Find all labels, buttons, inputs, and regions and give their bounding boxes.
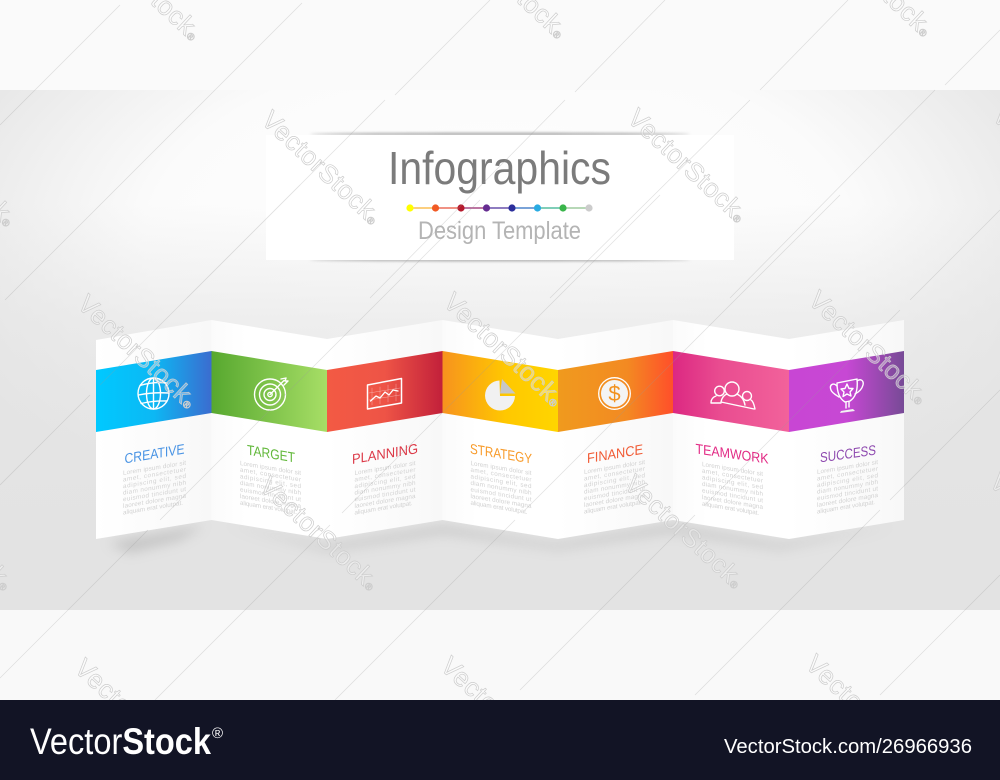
text: strategy: aliquam erat volutpat. xyxy=(470,500,528,516)
VectorStock watermarks: VectorStock® xyxy=(438,286,570,412)
text: planning: amet, consectetuer xyxy=(354,467,415,484)
text: strategy: Lorem ipsum dolor sit xyxy=(470,460,532,477)
text: success: euismod tincidunt ut xyxy=(817,485,878,502)
text: strategy: euismod tincidunt ut xyxy=(470,486,532,503)
title card xyxy=(266,133,734,261)
top background strip xyxy=(0,0,1000,90)
VectorStock watermarks: VectorStock® xyxy=(69,652,201,778)
icon: chart board xyxy=(368,378,402,409)
text: strategy: amet, consectetuer xyxy=(470,467,531,484)
text: strategy: laoreet dolore magna xyxy=(470,493,532,510)
text: creative: amet, consectetuer xyxy=(123,466,186,484)
text: planning xyxy=(354,460,416,517)
text: target: laoreet dolore magna xyxy=(240,493,301,510)
text: finance: diam nonummy nibh xyxy=(584,479,645,496)
registered mark: ® xyxy=(212,725,223,742)
text: finance: euismod tincidunt ut xyxy=(584,485,645,502)
text: creative: euismod tincidunt ut xyxy=(123,486,186,503)
text: success: adipiscing elit, sed xyxy=(817,472,878,489)
label: finance: FINANCE xyxy=(587,441,643,466)
icon: pie chart xyxy=(485,379,516,410)
bottom background strip xyxy=(0,610,1000,700)
text: planning: diam nonummy nibh xyxy=(354,480,416,497)
band: creative xyxy=(96,351,212,432)
VectorStock watermarks: VectorStock® xyxy=(72,288,204,414)
label: strategy: STRATEGY xyxy=(470,440,532,467)
text: target: Lorem ipsum dolor sit xyxy=(240,460,301,477)
folded paper shadow xyxy=(108,524,895,553)
text: teamwork: amet, consectetuer xyxy=(702,468,763,485)
text: finance: Lorem ipsum dolor sit xyxy=(584,459,645,476)
label: success: SUCCESS xyxy=(820,442,876,465)
text: teamwork: diam nonummy nibh xyxy=(702,481,763,498)
text: creative: diam nonummy nibh xyxy=(123,479,186,497)
text: teamwork: laoreet dolore magna xyxy=(702,494,763,511)
text: planning: laoreet dolore magna xyxy=(354,493,416,510)
text: teamwork: aliquam erat volutpat. xyxy=(702,501,759,517)
panel 5: finance xyxy=(558,320,673,539)
panel 1: creative xyxy=(96,320,212,539)
grey background panel xyxy=(0,90,1000,610)
label: creative: CREATIVE xyxy=(124,441,184,466)
text: target: diam nonummy nibh xyxy=(240,480,301,497)
VectorStock watermarks: VectorStock® xyxy=(619,468,751,594)
subtitle: Design Template xyxy=(418,217,581,245)
text: success: amet, consectetuer xyxy=(817,466,878,483)
text: finance: aliquam erat volutpat. xyxy=(584,499,642,516)
text: teamwork: euismod tincidunt ut xyxy=(702,487,763,504)
text: success: aliquam erat volutpat. xyxy=(817,499,875,516)
text: strategy: diam nonummy nibh xyxy=(470,480,532,497)
band: finance xyxy=(558,351,673,432)
text: teamwork: Lorem ipsum dolor sit xyxy=(702,461,763,478)
label: planning: PLANNING xyxy=(352,440,418,467)
text: planning: adipiscing elit, sed xyxy=(354,473,416,490)
footer logo: VectorStock xyxy=(30,721,211,762)
text: teamwork xyxy=(702,461,763,518)
VectorStock watermarks: VectorStock® xyxy=(803,284,935,410)
VectorStock watermarks: VectorStock® xyxy=(254,470,386,596)
text: target: euismod tincidunt ut xyxy=(240,486,301,503)
text: success: laoreet dolore magna xyxy=(817,492,878,509)
VectorStock watermarks: VectorStock® xyxy=(256,104,388,230)
text: strategy xyxy=(470,460,532,517)
colored dot timeline xyxy=(406,204,593,212)
footer image id: VectorStock.com/26966936 xyxy=(724,736,972,758)
label: target: TARGET xyxy=(247,442,295,465)
band: teamwork xyxy=(673,351,789,432)
text: creative: aliquam erat volutpat. xyxy=(123,500,183,517)
panel 6: teamwork xyxy=(673,320,789,539)
icon: globe xyxy=(138,378,169,409)
band: success xyxy=(789,351,904,432)
text: success xyxy=(817,459,878,516)
VectorStock watermarks: VectorStock® xyxy=(435,650,567,776)
text: creative: laoreet dolore magna xyxy=(123,493,186,510)
band: planning xyxy=(327,351,442,432)
icon: dollar coin: $ xyxy=(608,381,621,406)
text: planning: Lorem ipsum dolor sit xyxy=(354,460,416,477)
text: finance: laoreet dolore magna xyxy=(584,492,645,509)
panel 2: target xyxy=(212,320,327,539)
text: creative: Lorem ipsum dolor sit xyxy=(123,460,186,477)
text: creative xyxy=(123,460,186,517)
band: target xyxy=(212,351,327,432)
panel 4: strategy xyxy=(442,320,558,539)
text: success: diam nonummy nibh xyxy=(817,479,878,496)
text: planning: euismod tincidunt ut xyxy=(354,486,416,503)
text: success: Lorem ipsum dolor sit xyxy=(817,459,878,476)
text: finance: adipiscing elit, sed xyxy=(584,472,645,489)
VectorStock watermarks: VectorStock® xyxy=(622,102,754,228)
panel 3: planning xyxy=(327,320,442,539)
text: finance xyxy=(584,459,645,516)
band: strategy xyxy=(442,351,558,432)
panel 7: success xyxy=(789,320,904,539)
text: target: amet, consectetuer xyxy=(240,467,301,484)
text: strategy: adipiscing elit, sed xyxy=(470,473,532,490)
footer bar xyxy=(0,700,1000,780)
text: finance: amet, consectetuer xyxy=(584,466,645,483)
icon: team of people xyxy=(711,382,755,409)
icon: dollar coin xyxy=(599,378,630,409)
label: teamwork: TEAMWORK xyxy=(696,440,769,467)
title: Infographics xyxy=(388,142,611,194)
text: teamwork: adipiscing elit, sed xyxy=(702,474,763,491)
text: target: adipiscing elit, sed xyxy=(240,473,301,490)
text: target xyxy=(240,460,301,517)
icon: target with arrow xyxy=(254,378,288,410)
VectorStock watermarks: VectorStock® xyxy=(800,648,932,774)
text: creative: adipiscing elit, sed xyxy=(123,473,186,490)
text: planning: aliquam erat volutpat. xyxy=(354,500,413,517)
icon: trophy xyxy=(830,379,863,413)
text: target: aliquam erat volutpat. xyxy=(240,500,297,516)
